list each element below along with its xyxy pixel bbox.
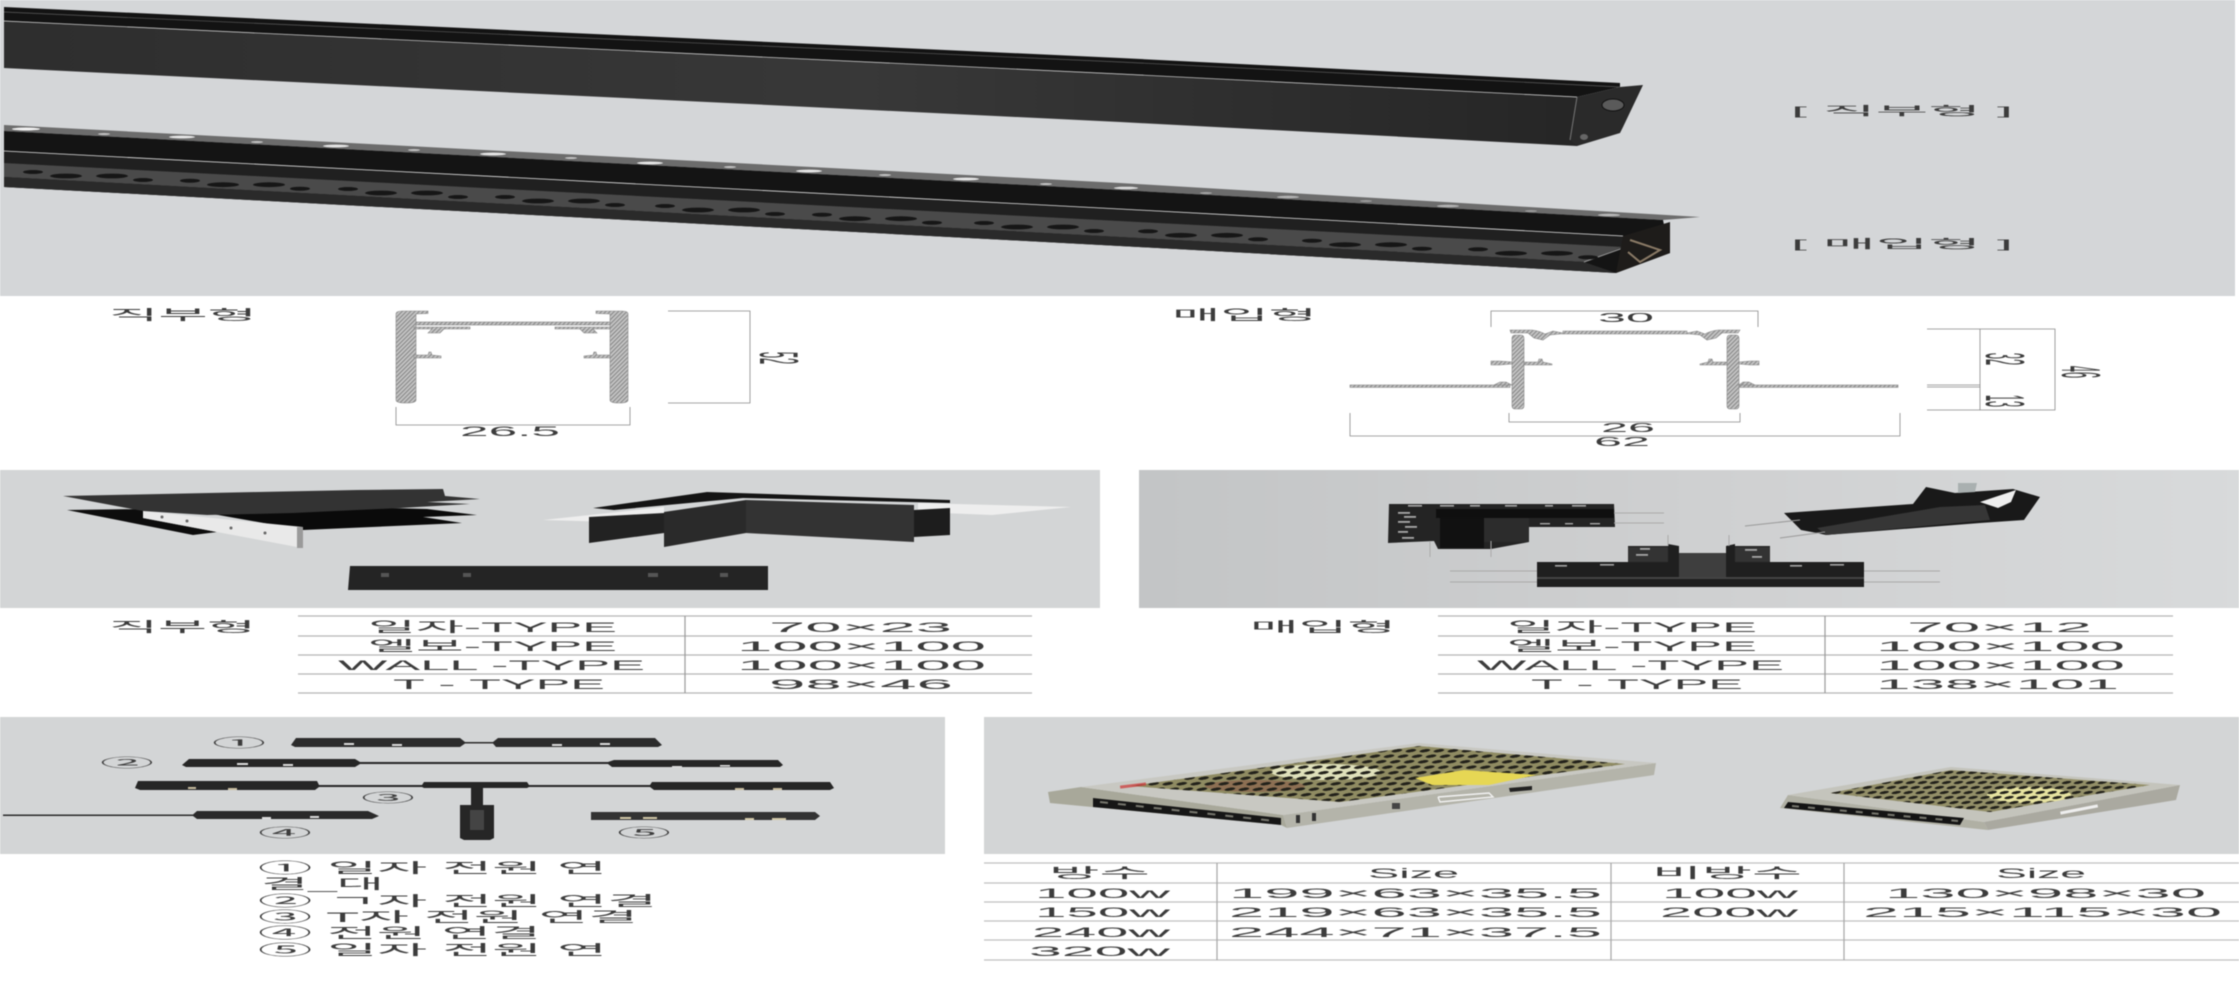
table: power supply sizes: 320w (1029, 943, 1174, 959)
table: power supply sizes: 200w (1660, 904, 1802, 920)
dimension: 32: 32 (1974, 353, 2035, 365)
table: recessed connector sizes: WALL -TYPE (1477, 657, 1784, 673)
table: power supply sizes: 130×98×30 (1885, 885, 2207, 901)
connector: recessed T (1450, 535, 1940, 587)
table: recessed connector sizes (1438, 616, 2173, 693)
number 5: ⑤ (617, 826, 671, 840)
table: power supply sizes: Size (1368, 865, 1460, 881)
legend: power connection list: ⑤ 일자 전원 연 (258, 942, 607, 958)
table: power supply sizes: Size (1996, 865, 2087, 881)
table: recessed connector sizes: 일자-TYPE (1507, 619, 1757, 635)
table: power supply sizes: 100w (1035, 885, 1174, 901)
table: power supply sizes (984, 863, 2239, 960)
surface-mounted rail (4, 7, 1643, 146)
heading: recessed section: 매입형 (1172, 307, 1317, 323)
heading: recessed type table: 매입형 (1250, 619, 1396, 635)
connector 2 (182, 759, 783, 768)
table: recessed connector sizes: 100×100 (1876, 638, 2126, 654)
table: surface connector sizes: 일자-TYPE (368, 619, 617, 635)
connector: wall (543, 492, 1071, 547)
legend: power connection list: ④ 전원 연결 (258, 925, 541, 941)
panel: power supply photo (984, 717, 2239, 854)
table: surface connector sizes: 98×46 (769, 676, 954, 692)
table: recessed connector sizes: 70×12 (1907, 619, 2093, 635)
dimension: 30: 30 (1598, 310, 1654, 325)
table: surface connector sizes: 70×23 (769, 619, 953, 635)
table: power supply sizes: 150w (1035, 904, 1174, 920)
dimension: 52: 52 (748, 352, 809, 364)
label: surface type: [ 직부형 ] (1791, 104, 2013, 118)
connector: recessed elbow (1388, 504, 1664, 557)
table: surface connector sizes: 100×100 (737, 638, 987, 654)
legend: power connection list: ① 일자 전원 연 (258, 860, 607, 876)
panel: power connection photo (0, 717, 945, 854)
legend: power connection list: ③ T자 전원 연결 (258, 909, 638, 925)
table: surface connector sizes: T - TYPE (393, 676, 605, 692)
recessed rail (4, 125, 1700, 273)
number 1: ① (212, 736, 266, 750)
panel: surface corner connectors photo (0, 470, 1100, 608)
panel: rail photo band (0, 0, 2235, 296)
dimension: 26: 26 (1601, 420, 1655, 435)
connector 4 with cable (3, 811, 379, 819)
legend: power connection list: ② ㄱ자 전원 연결 (258, 893, 657, 909)
legend: power connection list (258, 860, 657, 958)
heading: surface type table: 직부형 (109, 619, 256, 635)
dimension: 46: 46 (2050, 366, 2111, 378)
table: power supply sizes: 방수 (1049, 865, 1150, 881)
table: surface connector sizes: 엘보-TYPE (368, 638, 617, 654)
table: surface connector sizes: WALL -TYPE (338, 657, 645, 673)
table: power supply sizes: 244×71×37.5 (1229, 924, 1603, 940)
table: recessed connector sizes: 엘보-TYPE (1507, 638, 1757, 654)
table: recessed connector sizes: 100×100 (1876, 657, 2126, 673)
number 2: ② (100, 756, 154, 770)
table: power supply sizes: 219×63×35.5 (1229, 904, 1603, 920)
table: power supply sizes: 100w (1662, 885, 1802, 901)
number 4: ④ (258, 826, 312, 840)
number 3: ③ (361, 791, 415, 805)
table: recessed connector sizes: T - TYPE (1531, 676, 1743, 692)
drawing: surface rail cross-section (396, 311, 809, 425)
table: power supply sizes: 비방수 (1652, 865, 1802, 881)
connector 1 (291, 738, 662, 747)
table: recessed connector sizes: 138×101 (1876, 676, 2120, 692)
table: power supply sizes: 199×63×35.5 (1229, 885, 1603, 901)
label: recessed type: [ 매입형 ] (1791, 237, 2013, 251)
connector: straight (348, 566, 768, 590)
panel: recessed corner connectors photo (1139, 470, 2239, 608)
dimension: 62: 62 (1594, 434, 1650, 449)
connector 5 (591, 812, 820, 820)
power supply: large (1048, 743, 1656, 828)
table: surface connector sizes: 100×100 (737, 657, 987, 673)
connector 3 with T joint (135, 781, 834, 840)
table: surface connector sizes (298, 616, 1032, 693)
dimension: 26.5: 26.5 (460, 423, 561, 439)
heading: surface section: 직부형 (109, 307, 257, 323)
drawing: recessed rail cross-section (1350, 311, 2055, 436)
power supply: small (1780, 767, 2180, 830)
connector: recessed wall (1745, 483, 2040, 538)
connector: elbow (63, 489, 480, 548)
table: power supply sizes: 215×115×30 (1863, 904, 2223, 920)
legend: power connection list: 결_대 (261, 876, 384, 892)
table: power supply sizes: 240w (1032, 924, 1174, 940)
dimension: 13: 13 (1974, 395, 2035, 407)
